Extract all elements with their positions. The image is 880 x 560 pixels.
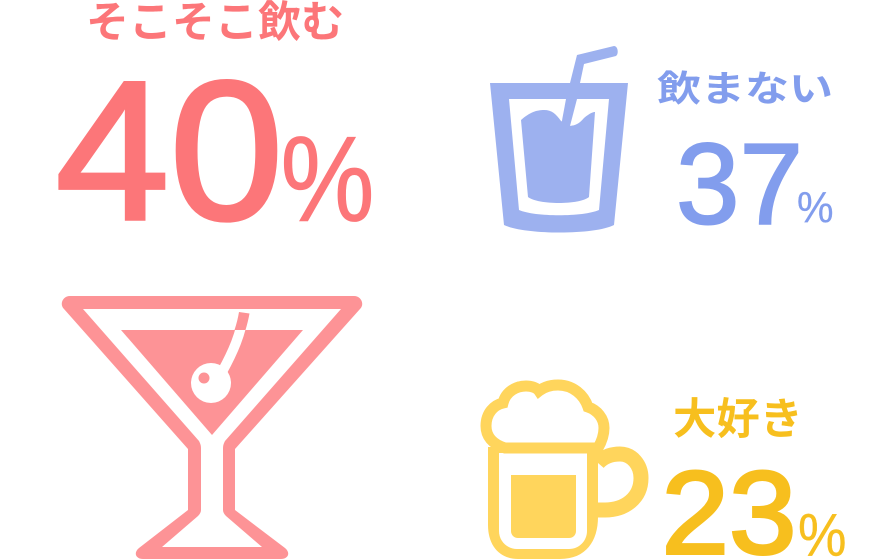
- heading: moderate drinkers: そこそこ飲む: [86, 0, 344, 47]
- icon: martini glass: [62, 296, 362, 559]
- panel: beer lovers 23%: [662, 396, 846, 560]
- number: 37: 37: [676, 120, 803, 248]
- percent sign: 37: %: [797, 183, 834, 232]
- heading: beer lovers: 大好き: [673, 396, 803, 444]
- percent sign: 40: %: [280, 111, 374, 247]
- panel: non-drinkers 37%: [657, 68, 834, 248]
- number: 40: 40: [56, 40, 284, 261]
- panel: moderate drinkers 40%: [56, 0, 374, 261]
- heading: non-drinkers: 飲まない: [657, 68, 833, 109]
- icon: beer mug: [486, 385, 641, 559]
- icon: juice glass with straw: [490, 46, 628, 232]
